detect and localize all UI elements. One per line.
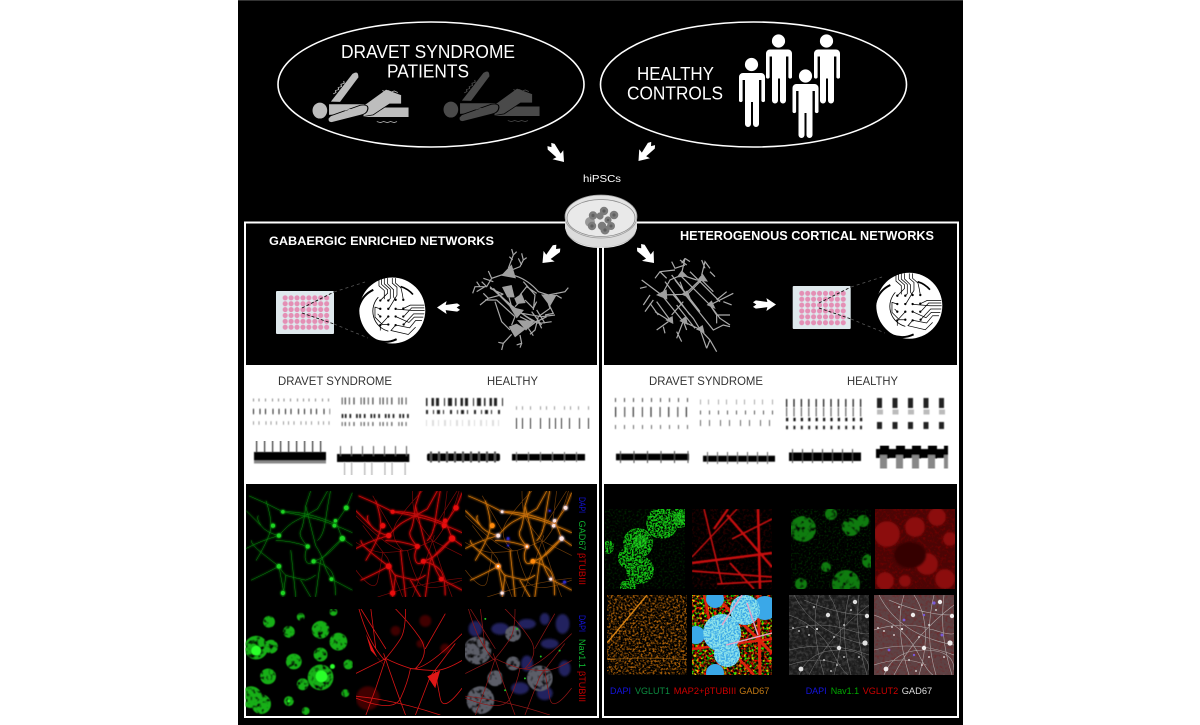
label: GAD67 stain legend: GAD67 (576, 520, 587, 550)
heading: healthy, right: HEALTHY (847, 374, 898, 388)
micrograph: MAP2 red filaments (692, 509, 772, 589)
panel: Dravet syndrome patients (278, 22, 584, 147)
micrograph: GAD67 orange texture (607, 595, 687, 674)
heading: Dravet syndrome patients: PATIENTS (387, 62, 469, 82)
label: left stain legend: VGLUT1 (635, 686, 670, 697)
panel: GABAergic enriched networks (245, 222, 598, 717)
micrograph: merged pink and white (874, 595, 954, 675)
icon: group of people (739, 34, 840, 138)
raster plots, left (253, 400, 589, 424)
waveform traces, left (254, 446, 585, 470)
heading: heterogenous cortical networks: HETEROGENOUS CORTICAL NETWORKS (680, 229, 934, 243)
raster plots, right (615, 400, 952, 428)
micrograph: VGLUT1 green puncta (605, 509, 685, 589)
illustration: electrode plate, right (793, 277, 885, 333)
icon: light patient having seizure (313, 73, 409, 123)
label: hiPSCs: hiPSCs (583, 173, 621, 185)
illustration: electrode plate, left (276, 282, 368, 338)
micrograph: merged blue nuclei (692, 595, 772, 675)
micrograph: VGLUT2 dark red (875, 509, 955, 589)
label: right stain legend: Nav1.1 (831, 686, 859, 697)
label: left stain legend: GAD67 (739, 686, 769, 697)
label: GAD67 stain legend (576, 497, 587, 585)
heading: Dravet syndrome, left: DRAVET SYNDROME (278, 374, 392, 388)
heading: healthy controls: CONTROLS (627, 84, 723, 104)
label: Nav1.1 stain legend: βTUBIII (576, 671, 587, 702)
arrow: dish to cortical neurons (633, 241, 660, 268)
heading: healthy controls: HEALTHY (637, 64, 714, 84)
micrograph: GAD67 green neurons (246, 491, 353, 597)
heading: Dravet syndrome, right: DRAVET SYNDROME (649, 374, 763, 388)
arrow: dish to GABAergic neurons (537, 241, 564, 268)
illustration: GABAergic neuron network (473, 249, 568, 350)
top edge (238, 0, 963, 1)
arrow: neurons to plate, left (437, 301, 460, 314)
micrograph: Nav1.1 dim green (791, 509, 871, 589)
panel: electrophysiology traces, left (246, 365, 597, 484)
label: left stain legend (610, 686, 769, 697)
label: right stain legend (806, 686, 932, 697)
background canvas (238, 0, 963, 725)
icon: dark patient having seizure (444, 72, 540, 122)
label: GAD67 stain legend: βTUBIII (576, 553, 587, 585)
illustration: cortical neuron network (640, 258, 733, 352)
micrograph: merged orange neurons (465, 491, 572, 597)
waveform traces, right (616, 449, 948, 465)
icon: petri dish of hiPSC colonies (565, 195, 637, 248)
micrograph: betaTUBIII thin red neurites (356, 609, 462, 715)
panel: heterogenous cortical networks (603, 222, 958, 717)
panel: healthy controls (600, 22, 906, 147)
label: Nav1.1 stain legend: Nav1.1 (576, 639, 587, 668)
heading: healthy, left: HEALTHY (487, 374, 538, 388)
micrograph: merged blue and red cells (465, 609, 572, 715)
heading: healthy controls (627, 64, 723, 104)
illustration: multi-electrode array, left (358, 278, 425, 343)
illustration: multi-electrode array, right (875, 273, 942, 339)
label: GAD67 stain legend: DAPI (576, 497, 587, 513)
label: right stain legend: DAPI (806, 686, 827, 697)
micrograph: Nav1.1 green blotches (246, 609, 353, 715)
arrow: patients to hiPSCs (544, 140, 569, 166)
label: Nav1.1 stain legend (576, 615, 587, 702)
arrow: controls to hiPSCs (633, 139, 659, 165)
heading: GABAergic enriched networks: GABAERGIC ENRICHED NETWORKS (269, 234, 494, 248)
micrograph: betaTUBIII red neurons (356, 491, 462, 597)
heading: Dravet syndrome patients: DRAVET SYNDROME (341, 42, 515, 62)
label: right stain legend: GAD67 (902, 686, 932, 697)
arrow: neurons to plate, right (753, 298, 776, 311)
heading: Dravet syndrome patients (341, 42, 515, 82)
label: left stain legend: MAP2+βTUBIII (674, 686, 736, 697)
label: left stain legend: DAPI (610, 686, 631, 697)
label: Nav1.1 stain legend: DAPI (576, 615, 587, 632)
panel: electrophysiology traces, right (604, 365, 957, 484)
micrograph: GAD67 white filaments (789, 595, 869, 675)
label: right stain legend: VGLUT2 (863, 686, 898, 697)
